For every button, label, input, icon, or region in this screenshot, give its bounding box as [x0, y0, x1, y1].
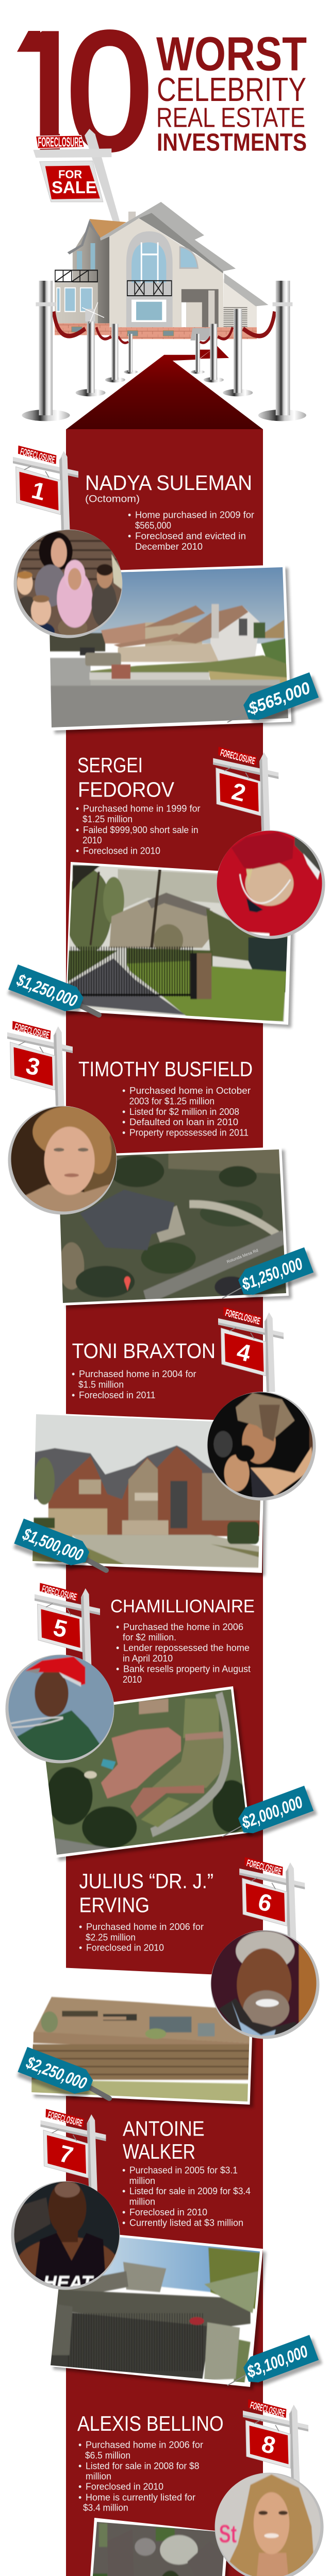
title: 0 — [67, 0, 152, 184]
panel: Julius Dr. J. Erving — [16, 1857, 322, 2108]
title: 1 — [0, 0, 93, 184]
subheading: (Octomom) — [85, 494, 140, 505]
title — [17, 29, 306, 152]
facts — [72, 1369, 196, 1400]
facts — [116, 1622, 251, 1685]
foreclosure sign 3 — [7, 1021, 73, 1106]
foreclosure sign 6 — [239, 1857, 305, 1942]
facts: • — [76, 804, 79, 814]
facts: million — [129, 2176, 155, 2186]
facts: • — [128, 531, 131, 541]
facts: Failed $999,900 short sale in — [83, 825, 198, 835]
foreclosure sign 5: FORECLOSURE — [41, 1584, 78, 1603]
facts: • — [122, 1128, 125, 1138]
facts: Listed for $2 million in 2008 — [129, 1107, 239, 1117]
velvet rope stanchions — [22, 281, 306, 421]
foreclosure sign 4: 4 — [234, 1337, 254, 1367]
facts: • — [122, 2217, 125, 2228]
facts: • — [76, 846, 79, 856]
facts: • — [116, 1643, 119, 1653]
house photo 3: Rotunda Mesa Rd — [226, 1248, 259, 1264]
facts: $3.4 million — [83, 2503, 128, 2513]
facts: 2010 — [123, 1674, 142, 1685]
foreclosure sign 2: FORECLOSURE — [219, 748, 256, 767]
facts — [122, 2165, 251, 2228]
facts: million — [129, 2197, 155, 2207]
foreclosure sign 1: 1 — [29, 476, 48, 505]
portrait 7: HEAT — [43, 2273, 94, 2294]
foreclosure sign 3: FORECLOSURE — [13, 1022, 51, 1041]
title: WORST — [156, 27, 307, 80]
price tag 1: $565,000 — [245, 678, 313, 718]
price tag 3: $1,250,000 — [239, 1254, 305, 1294]
facts: Purchased home in 2006 for — [86, 2440, 203, 2450]
portrait 3 — [6, 1103, 120, 1216]
house photo 4 — [31, 1410, 268, 1576]
foreclosure sign 3: 3 — [23, 1052, 43, 1081]
price tag 4: $1,500,000 — [20, 1524, 86, 1565]
facts: • — [116, 1664, 119, 1674]
facts: • — [78, 2461, 81, 2471]
facts: $6.5 million — [85, 2450, 130, 2461]
facts: • — [72, 1390, 75, 1400]
facts: 2003 for $1.25 million — [129, 1096, 214, 1106]
foreclosure sign 6: FORECLOSURE — [245, 1858, 283, 1877]
foreclosure sign 8: FORECLOSURE — [249, 2400, 286, 2419]
facts: • — [122, 2186, 125, 2196]
portrait 2 — [214, 829, 328, 940]
heading: CHAMILLIONAIRE — [110, 1597, 255, 1617]
house photo 5 — [38, 1685, 253, 1861]
facts: • — [128, 510, 131, 520]
panel: Chamillionaire — [4, 1583, 317, 1861]
foreclosure sign 4: FORECLOSURE — [224, 1308, 261, 1327]
facts: $1.5 million — [78, 1379, 124, 1389]
facts: • — [122, 1086, 125, 1096]
facts: • — [78, 2492, 81, 2502]
facts: • — [79, 1922, 82, 1932]
price tag 3 — [222, 1247, 317, 1302]
foreclosure sign 6: 6 — [255, 1888, 275, 1917]
facts — [128, 510, 254, 552]
heading: ALEXIS BELLINO — [77, 2412, 224, 2435]
facts: Foreclosed in 2010 — [129, 2207, 207, 2217]
facts: Foreclosed in 2010 — [83, 846, 160, 856]
facts: Purchased home in 2004 for — [79, 1369, 196, 1379]
price tag 7 — [227, 2334, 322, 2390]
foreclosure sign 8: 8 — [259, 2430, 278, 2459]
heading: ERVING — [79, 1893, 150, 1917]
panel: Timothy Busfield — [6, 1021, 317, 1309]
hero foreclosure sign: SALE — [52, 178, 97, 197]
panel: Toni Braxton — [12, 1307, 318, 1576]
heading: NADYA SULEMAN — [85, 471, 252, 495]
house photo 6 — [31, 1967, 257, 2108]
price tag 1 — [227, 672, 322, 727]
facts: December 2010 — [135, 541, 203, 552]
foreclosure sign 8 — [243, 2399, 308, 2484]
panel: Sergei Fedorov — [7, 747, 328, 1028]
price tag 2: $1,250,000 — [14, 970, 80, 1010]
hero foreclosure sign: FOR — [58, 168, 82, 181]
price tag 6: $2,250,000 — [24, 2053, 90, 2093]
heading: SERGEI — [77, 753, 143, 777]
foreclosure sign 7: 7 — [57, 2140, 76, 2169]
facts: Home is currently listed for — [86, 2492, 195, 2502]
facts: • — [78, 2440, 81, 2450]
facts: Bank resells property in August — [123, 1664, 251, 1674]
facts: in April 2010 — [123, 1653, 173, 1664]
facts: Foreclosed in 2011 — [79, 1390, 156, 1400]
facts: • — [116, 1622, 119, 1632]
foreclosure sign 7: FORECLOSURE — [46, 2110, 84, 2129]
facts — [76, 804, 201, 856]
heading: TIMOTHY BUSFIELD — [78, 1057, 253, 1081]
panel: Alexis Bellino — [77, 2399, 324, 2576]
facts: $2.25 million — [86, 1932, 136, 1942]
price tag 5 — [222, 1785, 317, 1841]
heading — [123, 2116, 205, 2163]
price tag 5: $2,000,000 — [239, 1792, 305, 1832]
foreclosure sign 1 — [13, 446, 78, 531]
heading: ANTOINE — [123, 2116, 205, 2140]
facts: • — [72, 1369, 75, 1379]
foreclosure sign 1: FORECLOSURE — [19, 446, 56, 466]
portrait 7 — [11, 2181, 120, 2290]
facts: • — [122, 2207, 125, 2217]
facts: Currently listed at $3 million — [129, 2217, 243, 2228]
facts: Purchased home in 2006 for — [86, 1922, 204, 1932]
heading: FEDOROV — [78, 777, 175, 801]
portrait 5 — [4, 1654, 116, 1764]
hero foreclosure sign: FORECLOSURE — [38, 135, 82, 149]
maroon column — [66, 429, 263, 2576]
facts: Home purchased in 2009 for — [135, 510, 254, 520]
foreclosure sign 2: 2 — [229, 777, 249, 807]
facts: Purchased home in 1999 for — [83, 804, 201, 814]
heading: JULIUS “DR. J.” — [79, 1869, 213, 1893]
heading: WALKER — [123, 2140, 195, 2163]
facts: Listed for sale in 2008 for $8 — [86, 2461, 199, 2471]
panel: Nadya Suleman — [12, 446, 322, 734]
facts: Foreclosed in 2010 — [86, 2482, 163, 2492]
facts: Property repossessed in 2011 — [129, 1128, 249, 1138]
house photo 1 — [42, 560, 294, 734]
facts: $565,000 — [135, 520, 171, 531]
title: INVESTMENTS — [157, 129, 307, 157]
portrait 6 — [210, 1927, 322, 2040]
heading — [79, 1869, 213, 1917]
portrait 4 — [206, 1390, 318, 1502]
portrait 8: St — [219, 2520, 237, 2548]
foreclosure sign 7 — [40, 2109, 106, 2194]
house photo 8 — [84, 2517, 232, 2576]
facts: Purchased home in October — [129, 1086, 251, 1096]
facts: • — [122, 1117, 125, 1127]
facts: • — [122, 1107, 125, 1117]
facts: Lender repossessed the home — [123, 1643, 250, 1653]
facts: • — [79, 1943, 82, 1953]
facts: Purchased the home in 2006 — [123, 1622, 243, 1632]
price tag 7: $3,100,000 — [244, 2342, 310, 2381]
facts: Foreclosed in 2010 — [86, 1943, 164, 1953]
facts — [78, 2440, 203, 2513]
hero foreclosure sign — [33, 129, 120, 222]
heading — [77, 753, 175, 801]
facts — [122, 1086, 251, 1138]
house illustration — [55, 202, 268, 341]
house photo 2 — [65, 861, 297, 1028]
heading: TONI BRAXTON — [72, 1339, 216, 1363]
facts: Listed for sale in 2009 for $3.4 — [129, 2186, 251, 2196]
house photo 3 — [57, 1145, 292, 1309]
facts: • — [76, 825, 79, 835]
facts: million — [86, 2471, 111, 2482]
portrait 8 — [214, 2473, 326, 2576]
foreclosure sign 5: 5 — [51, 1614, 70, 1643]
panel: Antoine Walker — [10, 2109, 322, 2390]
facts — [79, 1922, 204, 1953]
facts: for $2 million. — [123, 1632, 176, 1642]
facts: 2010 — [82, 835, 102, 845]
facts: • — [122, 2165, 125, 2175]
facts: • — [78, 2482, 81, 2492]
facts: Purchased in 2005 for $3.1 — [129, 2165, 238, 2175]
house photo 7 — [48, 2229, 266, 2390]
facts: Foreclosed and evicted in — [135, 531, 246, 541]
foreclosure sign 5 — [35, 1583, 100, 1668]
foreclosure sign 2 — [213, 747, 278, 832]
facts: $1.25 million — [82, 814, 133, 824]
foreclosure sign 4 — [218, 1307, 284, 1392]
facts: Defaulted on loan in 2010 — [129, 1117, 238, 1127]
red carpet — [67, 346, 263, 429]
portrait 1 — [12, 528, 124, 641]
